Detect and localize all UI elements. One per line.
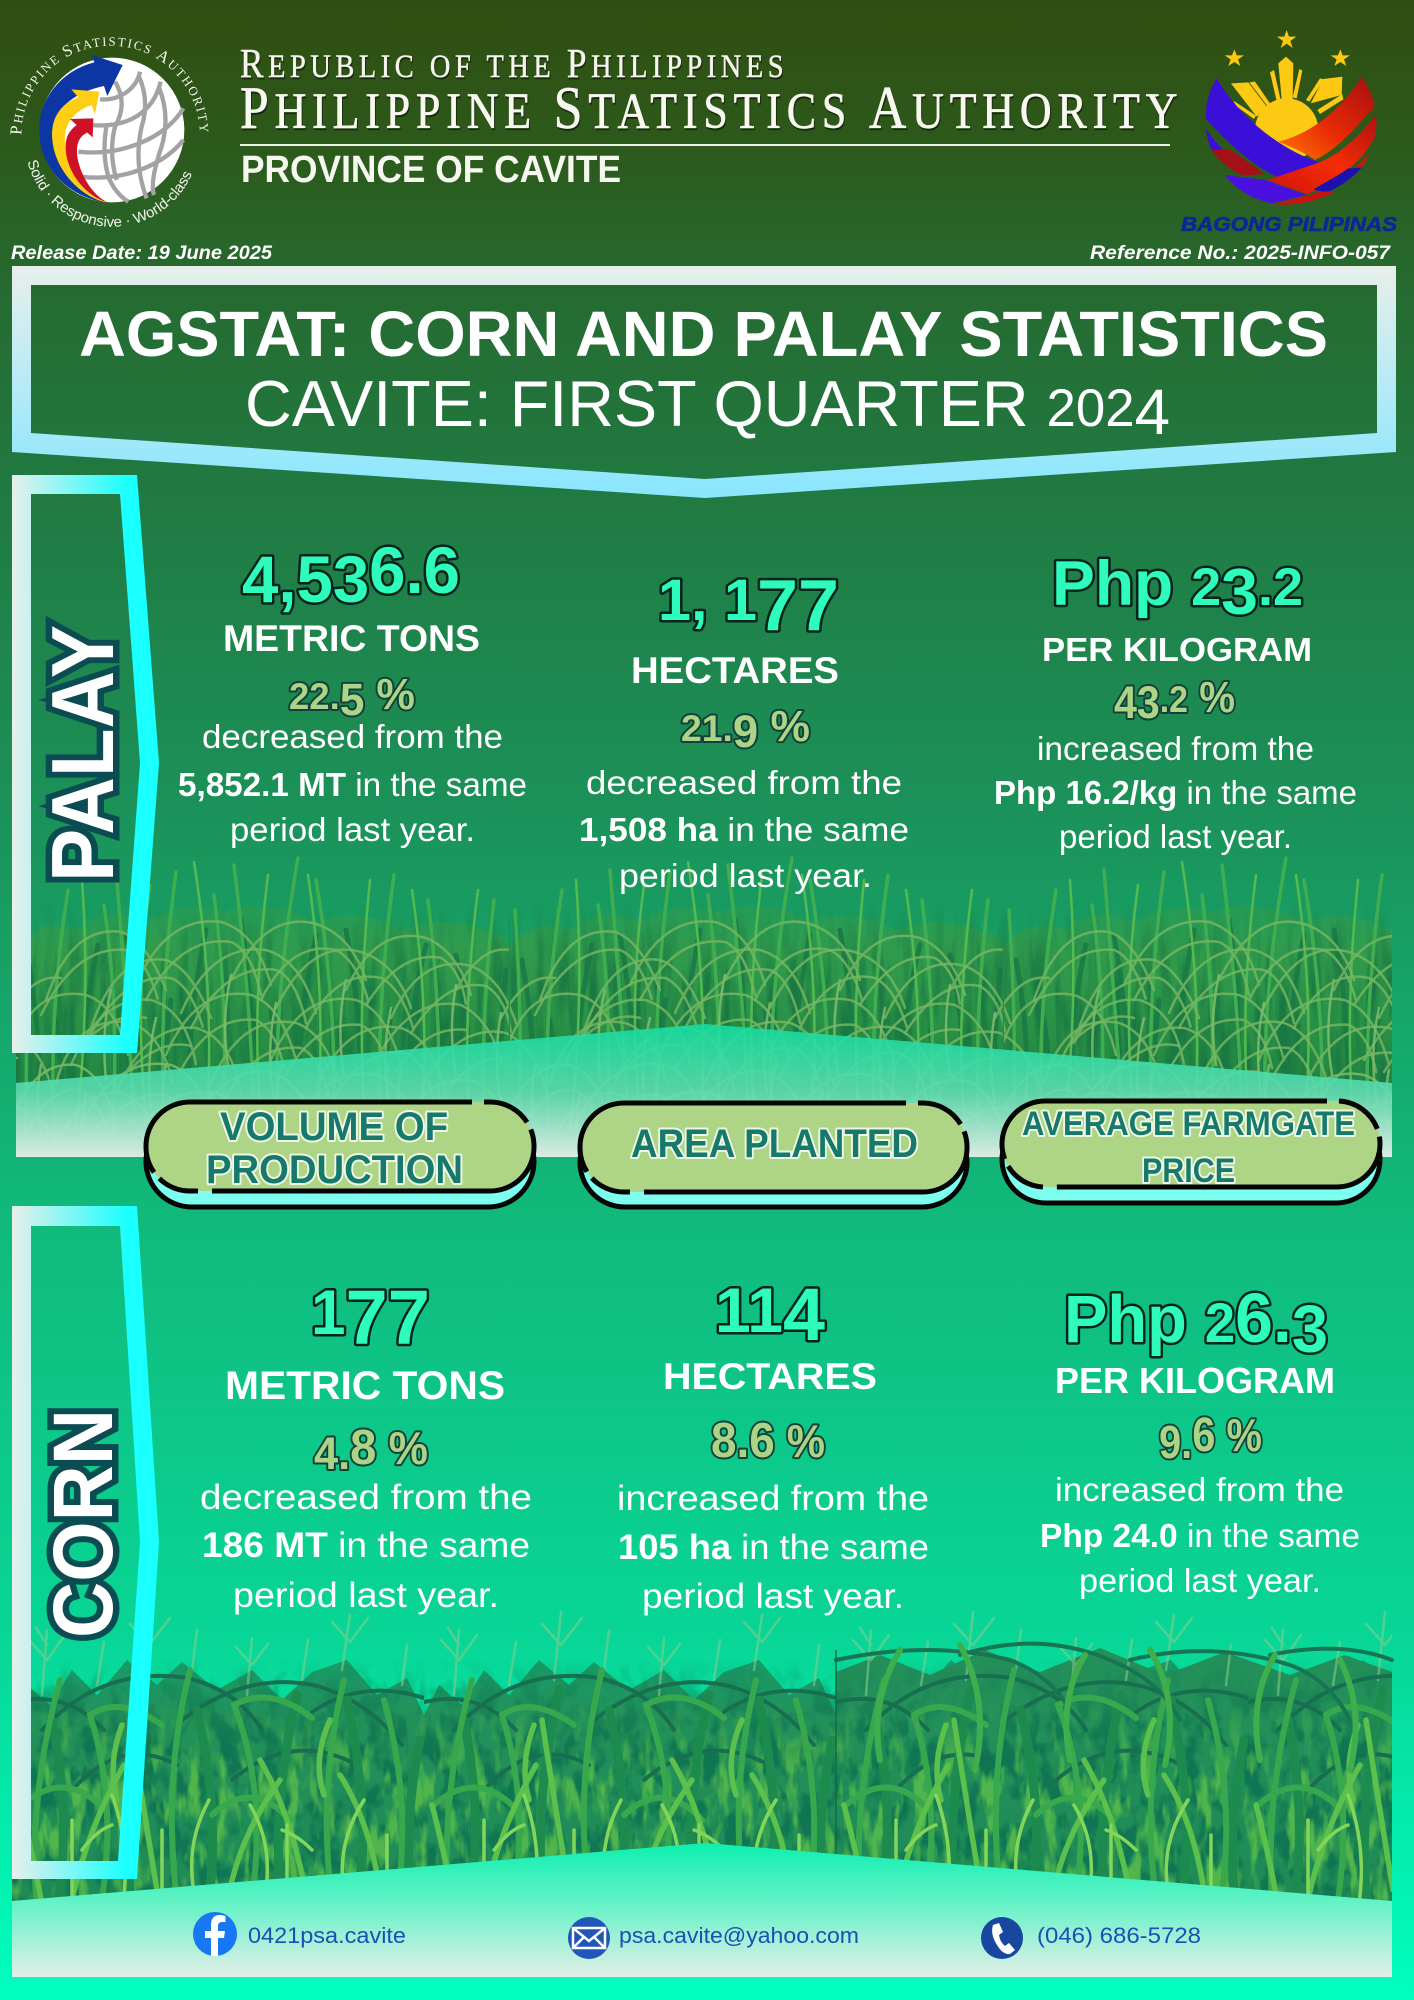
text: release date: Release Date: 19 June 2025 — [11, 243, 272, 264]
stat: corn area planted: 4 — [783, 1273, 825, 1356]
stat: volume of production: 6.6 — [369, 533, 460, 607]
stat: corn average farmgate price — [1040, 1279, 1360, 1599]
header rule — [240, 144, 1170, 146]
pill: volume of production: PRODUCTION — [206, 1148, 463, 1192]
stat: corn volume of production: 1 — [311, 1278, 346, 1348]
stat: area planted: 1,508 ha in the same — [579, 811, 909, 848]
stat: corn area planted — [617, 1273, 929, 1616]
stat: average farmgate price: 3 — [1221, 555, 1258, 628]
stat: area planted: 9 — [733, 706, 758, 757]
text: Bagong Pilipinas: BAGONG PILIPINAS — [1181, 214, 1398, 236]
stat: average farmgate price: .2 — [1160, 679, 1188, 720]
stat: area planted: % — [758, 702, 810, 751]
panel: corn side label — [12, 1206, 159, 1879]
icon: telephone — [981, 1917, 1023, 1959]
stat: area planted — [579, 566, 909, 894]
stat: volume of production: 5,852.1 MT in the same — [178, 766, 527, 803]
stat: corn area planted: 8.6 % — [711, 1414, 825, 1468]
contact: facebook page: 0421psa.cavite — [248, 1923, 406, 1948]
stat: corn area planted: 105 ha in the same — [618, 1528, 929, 1567]
stat: corn volume of production: % — [376, 1422, 428, 1474]
stat: corn volume of production: decreased from the — [200, 1478, 532, 1517]
title line 2: CAVITE: FIRST QUARTER 202 — [245, 367, 1135, 440]
stat: corn average farmgate price: increased from the — [1055, 1471, 1344, 1508]
banner frame — [12, 266, 1396, 498]
stat: volume of production: % — [364, 670, 415, 719]
stat: corn volume of production: 8 — [350, 1421, 376, 1475]
stat: corn average farmgate price: period last year. — [1079, 1562, 1321, 1599]
stat: corn average farmgate price: 3 — [1292, 1292, 1328, 1367]
title banner — [12, 266, 1396, 498]
pill: average farmgate price: PRICE — [1142, 1152, 1235, 1190]
label: PALAY: PALAY — [33, 625, 132, 882]
palay frame — [12, 475, 159, 1053]
stat: average farmgate price: period last year. — [1059, 818, 1292, 855]
stat: corn volume of production — [200, 1275, 532, 1615]
stat: average farmgate price — [994, 549, 1357, 855]
stat: corn average farmgate price: 6 — [1192, 1409, 1215, 1462]
panel: footer band — [12, 1843, 1392, 1977]
stat: average farmgate price: Php 16.2/kg in the same — [994, 774, 1357, 811]
title line 1: AGSTAT: CORN AND PALAY STATISTICS — [79, 298, 1328, 370]
heading: Province of Cavite: PROVINCE OF CAVITE — [241, 149, 621, 191]
pill: average farmgate price: AVERAGE FARMGATE — [1022, 1105, 1355, 1143]
contact: email address: psa.cavite@yahoo.com — [619, 1923, 859, 1948]
stat: average farmgate price: % — [1188, 673, 1235, 722]
icon: PSA logo: PHILIPPINE STATISTICS AUTHORITY — [10, 37, 208, 134]
stat: average farmgate price: Php 2 — [1052, 549, 1221, 619]
stat: volume of production: period last year. — [230, 811, 475, 848]
label: CORN: CORN — [36, 1409, 130, 1638]
panel: palay statistics — [178, 533, 1357, 894]
stat: area planted: 21. — [681, 708, 732, 749]
title line 2: 4 — [1135, 376, 1170, 448]
stat: area planted: 77 — [757, 566, 839, 646]
stat: corn average farmgate price: % — [1215, 1409, 1262, 1461]
icon: facebook — [193, 1912, 237, 1956]
stat: corn area planted: increased from the — [617, 1479, 929, 1518]
panel: corn statistics — [200, 1273, 1360, 1616]
contact: telephone number: (046) 686-5728 — [1037, 1923, 1201, 1948]
stat: corn area planted: period last year. — [642, 1577, 904, 1616]
stat: corn volume of production: METRIC TONS — [225, 1364, 505, 1408]
stat: area planted: period last year. — [619, 857, 872, 894]
stat: volume of production: METRIC TONS — [223, 618, 480, 659]
stat: average farmgate price: PER KILOGRAM — [1042, 631, 1312, 668]
stat: volume of production: 22. — [289, 676, 340, 717]
stat: corn volume of production: 77 — [346, 1275, 430, 1361]
stat: volume of production: decreased from the — [202, 718, 503, 755]
footer contacts — [193, 1912, 1201, 1959]
stat: average farmgate price: 43 — [1114, 677, 1164, 728]
icon: PSA logo: Solid · Responsive · World-class — [28, 160, 192, 227]
image band: rice field — [16, 850, 1392, 1157]
stat: corn area planted: HECTARES — [663, 1356, 877, 1397]
stat: average farmgate price: increased from the — [1037, 730, 1314, 767]
stat: volume of production — [178, 533, 527, 848]
stat: corn average farmgate price: Php 24.0 in the same — [1040, 1517, 1360, 1554]
stat: corn average farmgate price: 9. — [1159, 1416, 1197, 1468]
stat: corn average farmgate price: Php 26. — [1064, 1279, 1294, 1357]
panel: palay floor band — [16, 1024, 1392, 1157]
icon: PSA logo — [10, 37, 208, 227]
stat: volume of production: 5 — [340, 674, 364, 725]
pill: volume of production: VOLUME OF — [220, 1105, 448, 1149]
stat: area planted: HECTARES — [631, 650, 839, 691]
stat: area planted: decreased from the — [586, 764, 902, 801]
stat: corn average farmgate price: PER KILOGRAM — [1055, 1360, 1335, 1401]
stat: corn volume of production: 186 MT in the same — [202, 1526, 530, 1565]
text: reference number: Reference No.: 2025-INFO-057 — [1090, 243, 1392, 264]
pill: average farmgate price — [1002, 1101, 1380, 1203]
header — [10, 30, 1398, 264]
pill: area planted: AREA PLANTED — [631, 1122, 918, 1166]
stat: corn area planted: 11 — [715, 1276, 782, 1346]
corn frame — [12, 1206, 159, 1879]
heading: Republic of the Philippines: REPUBLIC OF THE PHILIPPINES — [240, 42, 784, 87]
panel: palay side label — [12, 475, 159, 1053]
icon: Bagong Pilipinas emblem — [1206, 30, 1376, 205]
pill: volume of production — [146, 1102, 534, 1207]
heading: Philippine Statistics Authority: PHILIPPINE STATISTICS AUTHORITY — [240, 75, 1177, 142]
stat: volume of production: 4,53 — [242, 542, 370, 616]
stat: corn volume of production: period last year. — [233, 1576, 499, 1615]
stat: corn volume of production: 4. — [314, 1428, 352, 1479]
stat: average farmgate price: .2 — [1258, 558, 1303, 617]
icon: email — [568, 1917, 610, 1959]
pill: area planted — [580, 1103, 967, 1207]
image band: corn field — [12, 1600, 1392, 1910]
stat: area planted: 1, 1 — [658, 568, 755, 633]
